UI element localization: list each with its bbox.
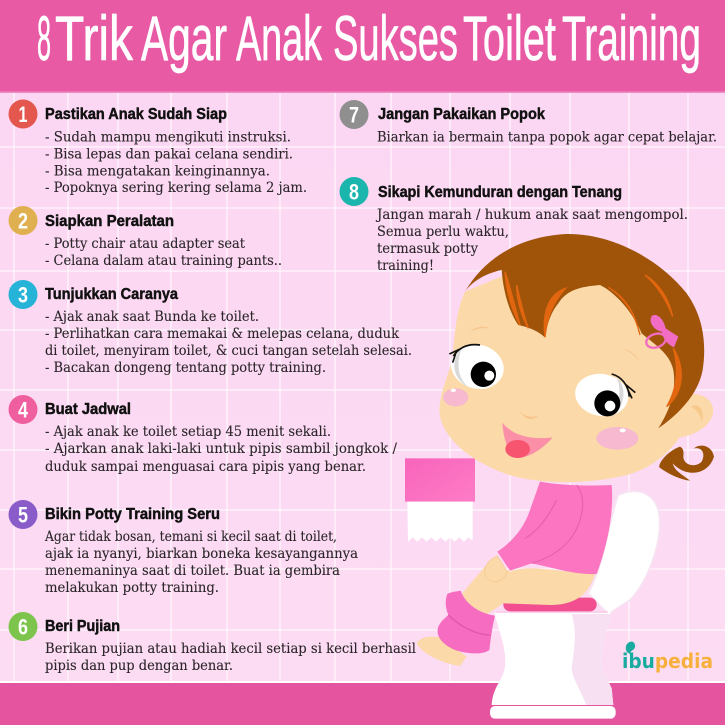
text 6: Berikan pujian atau hadiah kecil setiap si kecil berhasil [45,641,416,657]
heading 2: Siapkan Peralatan [45,213,174,230]
bow [644,315,678,350]
sock [438,591,495,653]
hair curl [659,446,714,481]
text 4: duduk sampai menguasai cara pipis yang benar. [45,459,366,475]
text 6: pipis dan pup dengan benar. [45,658,233,674]
panel: tip 2 [8,206,282,269]
text 6 [45,641,416,674]
text 5: melakukan potty training. [45,580,219,596]
shirt [497,482,612,574]
hair [465,234,704,428]
title: Toilet [463,4,556,74]
text 1: - Popoknya sering kering selama 2 jam. [45,180,307,196]
title: Trik [55,4,133,74]
heading 8: Sikapi Kemunduran dengan Tenang [378,184,622,201]
badge 2 [8,206,38,235]
text 5 [44,529,358,596]
text 4: - Ajak anak ke toilet setiap 45 menit sekali. [45,424,331,440]
heading 1: Pastikan Anak Sudah Siap [45,106,227,123]
logo: ibupedia [622,642,713,673]
header band with title [0,0,725,93]
text 5: Agar tidak bosan, temani si kecil saat di toilet, [44,529,337,545]
title: Sukses [333,4,458,74]
text 8: Semua perlu waktu, [377,224,509,240]
toilet [490,491,660,719]
icon: toilet paper roll [405,458,475,542]
panel: tip 5 [8,500,358,596]
ear [673,394,713,438]
badge 4: 4 [18,398,29,422]
badge 4 [8,395,38,424]
title: Agar [141,4,227,74]
text 1: - Bisa mengatakan keinginannya. [45,164,270,180]
badge 1 [8,100,38,128]
badge 7 [340,100,368,129]
heading 4: Buat Jadwal [45,401,131,418]
illustration: girl on potty [417,234,714,719]
panel: tip 3 [8,280,412,376]
heading 7: Jangan Pakaikan Popok [378,106,545,123]
footer band [0,681,725,725]
badge 3 [8,280,38,309]
badge 1: 1 [18,102,28,127]
foot [417,637,467,666]
text 3: - Ajak anak saat Bunda ke toilet. [45,309,259,325]
title: 8 [37,4,51,74]
logo figure [626,642,635,654]
heading 5: Bikin Potty Training Seru [45,506,220,523]
text 3: - Perlihatkan cara memakai & melepas celana, duduk [45,326,399,342]
mouth [502,423,553,458]
hair highlights [505,272,681,407]
head [439,234,714,482]
text 8: training! [377,258,434,274]
face [439,263,693,482]
panel: tip 6 [8,612,416,674]
text 5: ajak ia nyanyi, biarkan boneka kesayangannya [45,546,358,562]
left eye [446,339,509,395]
panel: tip 8 [340,177,688,274]
text 3 [45,309,412,376]
panel: tip 1 [8,100,307,196]
text 2: - Potty chair atau adapter seat [45,236,245,252]
badge 6: 6 [18,614,28,640]
logo wordmark: ibupedia [622,649,713,673]
heading 6: Beri Pujian [45,618,120,635]
text 8: termasuk potty [377,241,478,257]
panel: tip 4 [8,395,397,475]
body [417,482,612,666]
text 1 [45,130,307,196]
badge 2: 2 [18,208,28,234]
badge 3: 3 [18,282,28,308]
heading 3: Tunjukkan Caranya [45,286,178,303]
text 3: - Bacakan dongeng tentang potty training. [45,360,326,376]
hand [485,556,507,582]
cheeks [443,388,638,450]
badge 6 [8,612,38,641]
text 4 [45,424,397,475]
badge 8: 8 [349,180,359,204]
panel: tip 7 [340,100,717,146]
right eye [572,370,635,420]
text 5: menemaninya saat di toilet. Buat ia gembira [45,563,340,579]
text 8: Jangan marah / hukum anak saat mengompol. [375,207,688,223]
badge 5: 5 [18,502,28,528]
text 8 [375,207,688,274]
badge 7: 7 [349,102,359,128]
title [37,4,701,74]
text 4: - Ajarkan anak laki-laki untuk pipis sambil jongkok / [45,441,397,457]
text 3: di toilet, menyiram toilet, & cuci tangan setelah selesai. [45,343,412,359]
eyebrows and nose [470,327,640,419]
text 1: - Bisa lepas dan pakai celana sendiri. [45,146,293,162]
legs [460,560,595,617]
text 1: - Sudah mampu mengikuti instruksi. [45,130,291,146]
title: Anak [236,4,322,74]
badge 5 [8,500,38,529]
text 2: - Celana dalam atau training pants.. [45,253,282,269]
badge 8 [340,177,368,206]
text 2 [45,236,282,269]
